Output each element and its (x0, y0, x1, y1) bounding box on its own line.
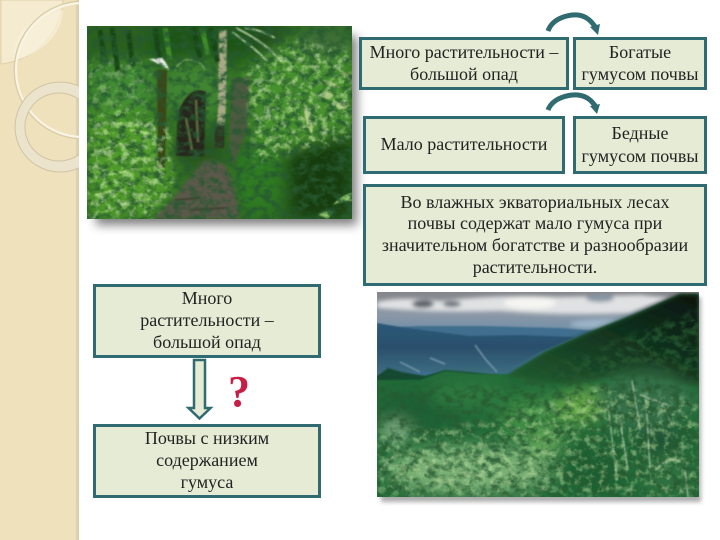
sidebar background (0, 0, 79, 540)
curved arrow: bottom (548, 95, 600, 114)
photo shadow: mountains (381, 297, 701, 502)
photo: mountain rainforest (377, 292, 699, 497)
box: little vegetation (363, 116, 565, 174)
box: rich soils (573, 37, 707, 90)
box: rich soils: Богатые (609, 42, 671, 62)
forest path (152, 161, 240, 219)
down arrow (188, 360, 210, 418)
box: poor soils: гумусом почвы (582, 146, 698, 166)
box: little vegetation: Мало растительности (381, 134, 547, 154)
box: much vegetation: Много растительности – (370, 42, 558, 62)
box: poor soils (573, 116, 707, 174)
box: much vegetation, lower (93, 284, 321, 358)
text box: equatorial forests: почвы содержат мало гумуса при (408, 213, 662, 233)
box: rich soils: гумусом почвы (582, 64, 698, 84)
photo shadow: forest (96, 36, 357, 225)
box: low humus soils (93, 424, 321, 498)
question mark: ? (228, 367, 250, 416)
box: low humus soils: Почвы с низким (145, 428, 269, 448)
text box: equatorial forests: Во влажных экваториальных лесах (400, 192, 670, 212)
box: much vegetation, lower: Много (182, 288, 232, 308)
box: poor soils: Бедные (612, 123, 668, 143)
box: low humus soils: содержанием (156, 450, 258, 470)
photo: rainforest path (87, 20, 353, 219)
text box: equatorial forests (363, 184, 707, 286)
box: much vegetation, lower: растительности – (140, 310, 274, 330)
text box: equatorial forests: растительности. (473, 257, 597, 277)
box: much vegetation: большой опад (410, 64, 518, 84)
text box: equatorial forests: значительном богатстве и разнообразии (382, 235, 688, 255)
box: much vegetation (359, 37, 569, 90)
box: low humus soils: гумуса (181, 472, 233, 492)
curved arrow: top (548, 15, 600, 35)
box: much vegetation, lower: большой опад (153, 332, 261, 352)
